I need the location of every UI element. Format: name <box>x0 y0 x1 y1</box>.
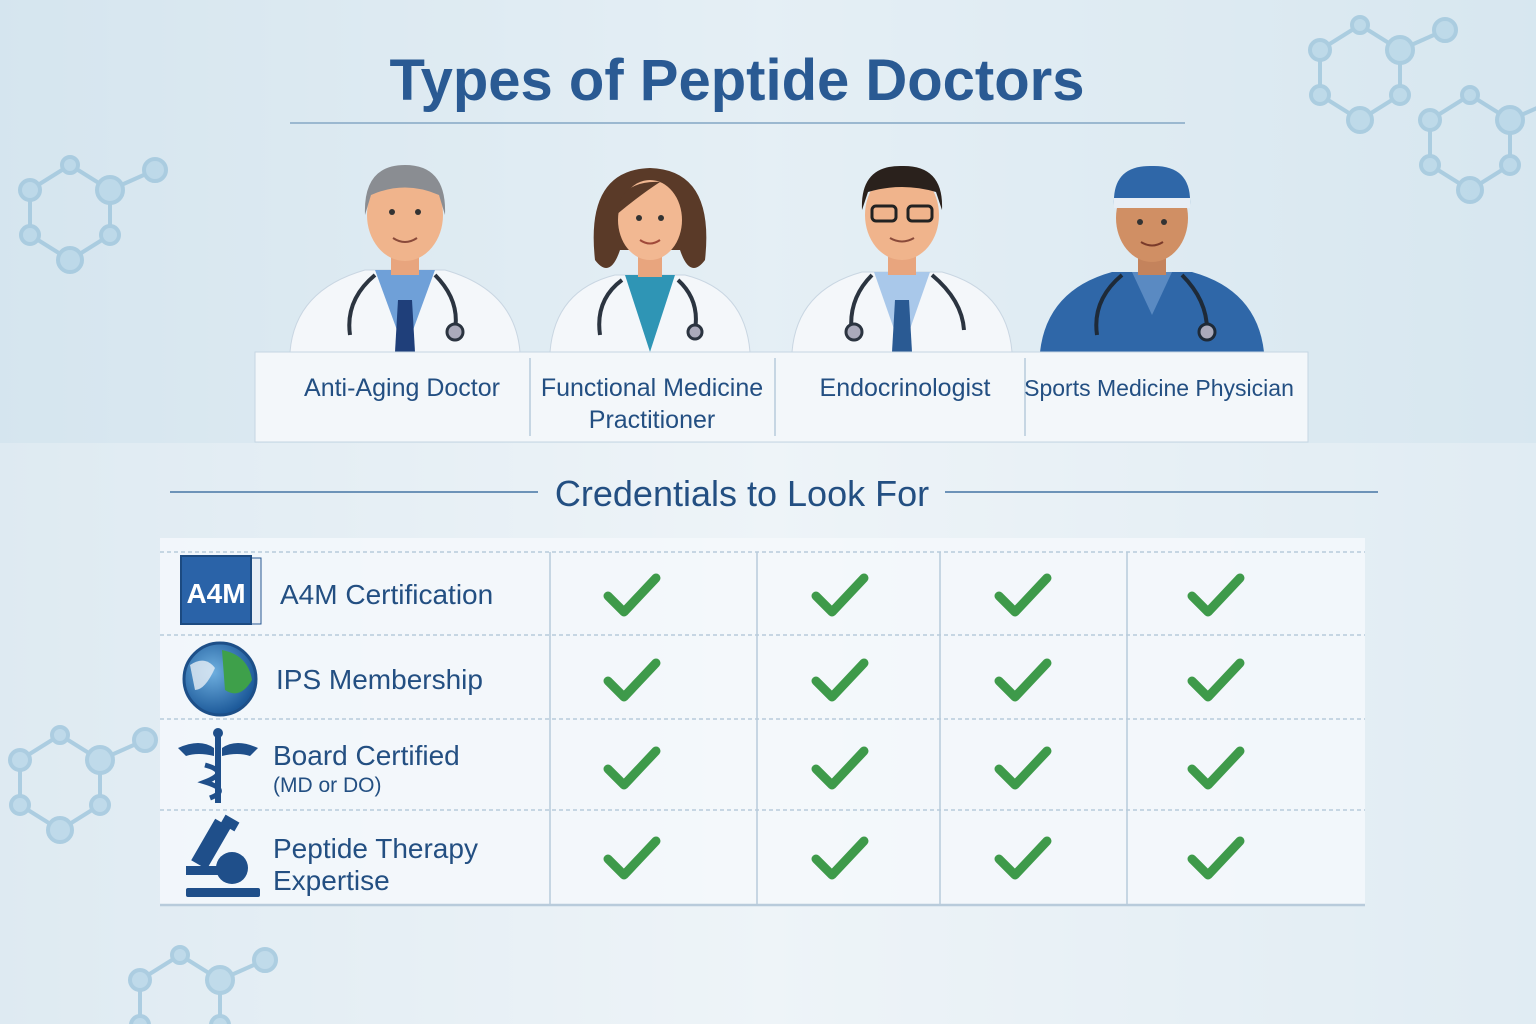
doctor 1: anti-aging <box>290 165 520 352</box>
doctor labels bar: Sports Medicine Physician <box>1024 375 1294 401</box>
credentials table: Peptide Therapy <box>273 833 478 864</box>
doctor 4: sports medicine <box>1040 166 1264 352</box>
checkmarks <box>608 578 1240 875</box>
doctors <box>290 165 1264 352</box>
credentials heading: Credentials to Look For <box>555 473 929 514</box>
doctor labels bar: Practitioner <box>589 406 715 434</box>
credentials table: A4M Certification <box>280 579 493 610</box>
icon: microscope <box>186 815 260 897</box>
credentials table: (MD or DO) <box>273 774 382 797</box>
credentials table: IPS Membership <box>276 664 483 695</box>
doctor labels bar: Functional Medicine <box>541 374 763 402</box>
credentials table <box>160 538 1365 905</box>
doctor 3: endocrinologist <box>792 166 1012 352</box>
credentials table: Expertise <box>273 865 390 896</box>
title: Types of Peptide Doctors <box>389 48 1085 113</box>
icon: A4M: A4M <box>186 578 246 609</box>
doctor labels bar: Anti-Aging Doctor <box>304 374 500 402</box>
icon: A4M <box>181 556 261 624</box>
doctor labels bar: Endocrinologist <box>820 374 991 402</box>
icon: caduceus <box>178 728 258 803</box>
credentials table: Board Certified <box>273 740 460 771</box>
doctor 2: functional medicine <box>550 168 750 352</box>
doctor labels bar <box>255 352 1308 442</box>
icon: globe <box>184 643 256 715</box>
